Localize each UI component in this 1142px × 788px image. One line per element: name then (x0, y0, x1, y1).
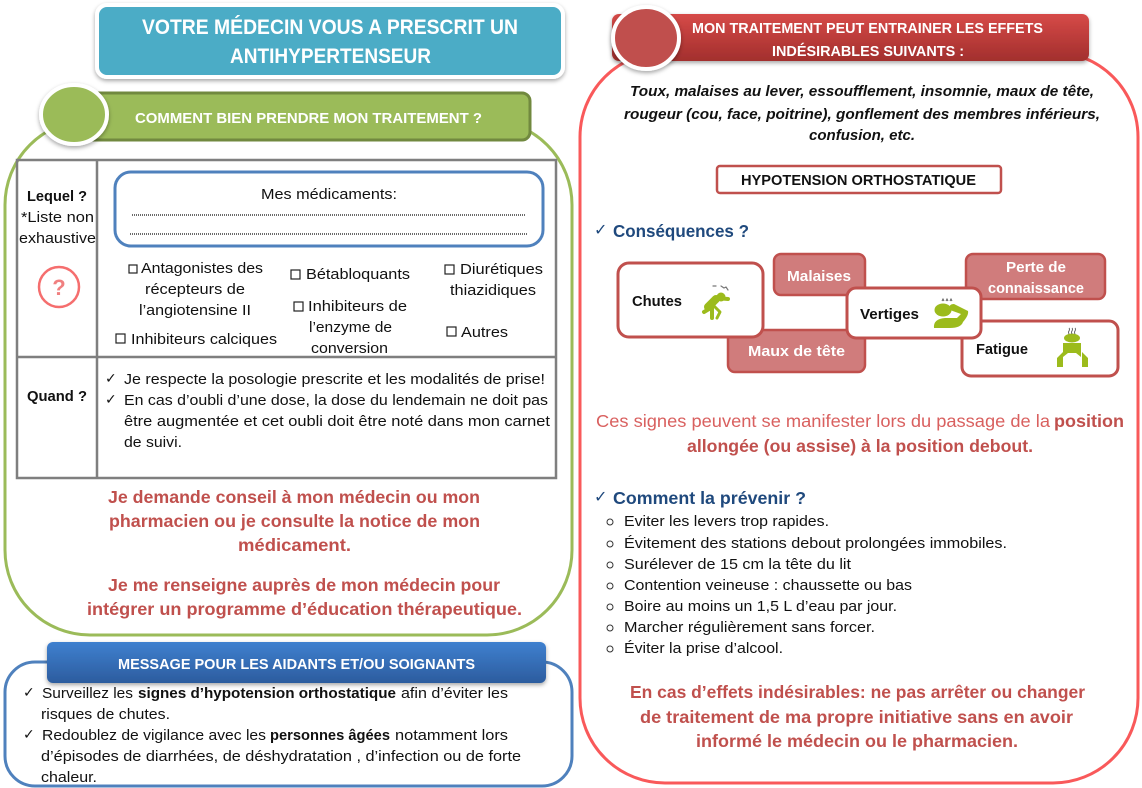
icon: dizzy person (934, 299, 968, 328)
caregiver messages: Surveillez les (42, 685, 133, 702)
red header bar: MON TRAITEMENT PEUT ENTRAINER LES EFFETS (692, 20, 1043, 37)
advice text (108, 487, 480, 555)
box: malaises (774, 254, 865, 295)
medication note box: Mes médicaments: (261, 186, 397, 203)
heading: comment la prévenir: Comment la prévenir ? (613, 488, 806, 508)
dosage instructions (105, 371, 551, 451)
medication checklist: Inhibiteurs de (308, 298, 407, 315)
box: fatigue (962, 321, 1118, 376)
red panel outline (580, 52, 1138, 783)
advice text: pharmacien ou je consulte la notice de mon (109, 511, 480, 531)
medication checklist: l’enzyme de (309, 319, 392, 336)
dosage instructions: ✓ (105, 371, 117, 387)
box: chutes (618, 263, 763, 337)
medication checklist: l’angiotensine II (139, 302, 251, 319)
blue panel outline (5, 662, 572, 786)
panel: comment bien prendre mon traitement (5, 85, 572, 635)
row label: quand: Quand ? (27, 388, 87, 405)
prevention list: Boire au moins un 1,5 L d’eau par jour. (624, 599, 897, 615)
dosage instructions: être augmentée et cet oubli doit être noté dans mon carnet (124, 413, 551, 430)
caregiver messages: d’épisodes de diarrhées, de déshydratation , d’infection ou de forte (41, 748, 521, 765)
caregiver messages: signes d’hypotension orthostatique (138, 685, 396, 702)
orthostatic explanation: Ces signes peuvent se manifester lors du passage de la (596, 411, 1050, 431)
advice text: médicament. (238, 535, 351, 555)
box: perte de connaissance: connaissance (988, 280, 1084, 297)
icon: question mark (39, 267, 79, 307)
side effects list: confusion, etc. (809, 127, 915, 144)
box: vertiges: Vertiges (860, 306, 919, 323)
education programme text (87, 575, 522, 619)
advice text: Je demande conseil à mon médecin ou mon (108, 487, 480, 507)
dosage instructions: En cas d’oubli d’une dose, la dose du lendemain ne doit pas (124, 392, 548, 409)
prevention list: Évitement des stations debout prolongées immobiles. (624, 535, 1007, 552)
medication checklist: Bétabloquants (306, 266, 410, 283)
caregiver messages: ✓ (23, 685, 35, 701)
treatment table (17, 160, 556, 478)
warning text: En cas d’effets indésirables: ne pas arrêter ou changer (630, 682, 1085, 702)
orthostatic explanation: position (1054, 411, 1124, 431)
box: malaises: Malaises (787, 268, 851, 285)
icon: question mark: ? (52, 275, 66, 300)
box: maux de tête (728, 330, 865, 372)
medication checklist: Diurétiques (460, 261, 543, 278)
medication checklist: Inhibiteurs calciques (131, 331, 277, 348)
box: perte de connaissance (966, 254, 1105, 299)
hypotension label: HYPOTENSION ORTHOSTATIQUE (741, 172, 976, 189)
prevention list: Éviter la prise d’alcool. (624, 640, 783, 657)
caregiver messages: risques de chutes. (41, 706, 170, 723)
prevention list: Eviter les levers trop rapides. (624, 514, 829, 530)
row label: lequel (19, 188, 96, 247)
medication checklist: récepteurs de (145, 281, 245, 298)
caregiver messages: personnes âgées (270, 727, 390, 744)
row label: lequel: Lequel ? (27, 188, 87, 205)
medication checklist (116, 260, 543, 357)
medication checklist: Antagonistes des (141, 260, 263, 277)
green header bar (78, 93, 530, 140)
blue header bar (47, 642, 546, 683)
medication checklist: Autres (461, 324, 508, 341)
green panel outline (5, 120, 572, 635)
green header circle (41, 85, 107, 144)
warning text (630, 682, 1085, 751)
title banner (97, 5, 563, 77)
title banner: VOTRE MÉDECIN VOUS A PRESCRIT UN (142, 16, 518, 39)
box: perte de connaissance: Perte de (1006, 259, 1066, 276)
box: chutes: Chutes (632, 293, 682, 310)
prevention list: Marcher régulièrement sans forcer. (624, 620, 875, 636)
prevention list: Surélever de 15 cm la tête du lit (624, 557, 851, 573)
red header bar (612, 14, 1089, 61)
caregiver messages: chaleur. (41, 769, 97, 786)
side effects list (624, 83, 1100, 144)
hypotension label (717, 166, 1001, 193)
red header bar: INDÉSIRABLES SUIVANTS : (772, 43, 964, 60)
side effects list: Toux, malaises au lever, essoufflement, insomnie, maux de tête, (630, 83, 1094, 100)
caregiver messages: afin d’éviter les (401, 685, 508, 702)
education programme text: intégrer un programme d’éducation thérapeutique. (87, 599, 522, 619)
medication checklist: thiazidiques (450, 282, 536, 299)
prevention list (607, 514, 1007, 657)
medication checklist: conversion (311, 340, 388, 357)
prevention list: Contention veineuse : chaussette ou bas (624, 578, 912, 594)
icon: tired person (1057, 328, 1088, 367)
consequences diagram (618, 254, 1118, 376)
heading: conséquences: ✓ (594, 220, 607, 239)
box: vertiges (847, 288, 981, 338)
box: maux de tête: Maux de tête (748, 343, 845, 360)
heading: conséquences: Conséquences ? (613, 221, 749, 241)
red header circle (613, 7, 679, 69)
caregiver messages (23, 685, 521, 786)
green header bar: COMMENT BIEN PRENDRE MON TRAITEMENT ? (135, 110, 482, 127)
warning text: de traitement de ma propre initiative sans en avoir (640, 707, 1073, 727)
heading: comment la prévenir: ✓ (594, 487, 607, 506)
dosage instructions: Je respecte la posologie prescrite et les modalités de prise! (124, 371, 545, 388)
title banner: ANTIHYPERTENSEUR (230, 45, 431, 68)
orthostatic explanation (596, 411, 1124, 456)
dosage instructions: ✓ (105, 392, 117, 408)
caregiver messages: Redoublez de vigilance avec les (42, 727, 266, 744)
row label: lequel: *Liste non (21, 209, 94, 226)
panel: effets indésirables (580, 7, 1138, 783)
caregiver messages: ✓ (23, 727, 35, 743)
blue header bar: MESSAGE POUR LES AIDANTS ET/OU SOIGNANTS (118, 656, 475, 673)
medication note box (115, 172, 543, 246)
dosage instructions: de suivi. (124, 434, 182, 451)
orthostatic explanation: allongée (ou assise) à la position debout. (687, 436, 1033, 456)
education programme text: Je me renseigne auprès de mon médecin pour (108, 575, 500, 595)
caregiver messages: notamment lors (395, 727, 508, 744)
row label: lequel: exhaustive (19, 230, 96, 247)
box: fatigue: Fatigue (976, 341, 1028, 358)
panel: message pour les aidants (5, 642, 572, 786)
side effects list: rougeur (cou, face, poitrine), gonflement des membres inférieurs, (624, 106, 1100, 123)
icon: falling person (704, 286, 728, 318)
warning text: informé le médecin ou le pharmacien. (696, 731, 1018, 751)
